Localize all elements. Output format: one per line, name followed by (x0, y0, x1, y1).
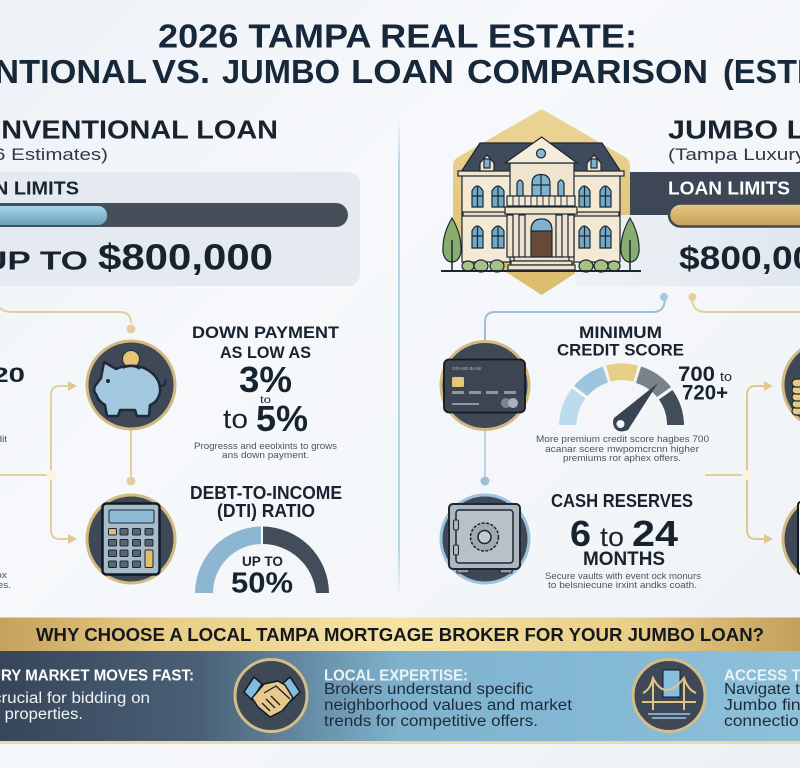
text: down payment: 3% (239, 359, 292, 400)
title: 2026 TAMPA REAL ESTATE: (158, 18, 637, 54)
connector: right blue and gold lines (480, 293, 800, 544)
icon: document (783, 495, 800, 583)
chart: credit score gauge (559, 363, 684, 431)
chart: DTI half gauge: UP TO (242, 553, 283, 569)
text: down payment: to (223, 404, 248, 434)
icon: safe (441, 495, 529, 583)
reason: local expertise: neighborhood values and market (324, 697, 573, 714)
panel: jumbo loan limits (575, 172, 800, 286)
reason: local expertise (324, 668, 573, 730)
text: cash reserves: to belsniecune irxint andks coath. (548, 580, 697, 591)
chart: DTI half gauge: 50% (231, 568, 293, 600)
title (0, 18, 800, 90)
text: cash reserves: 24 (632, 513, 678, 554)
text: minimum credit score: MINIMUM (579, 323, 662, 342)
mansion (441, 137, 641, 272)
text: down payment: AS LOW AS (220, 343, 311, 362)
text: credit score value: 700 (678, 363, 715, 386)
reason: local expertise: Brokers understand specific (324, 681, 533, 698)
panel: jumbo loan limits: LOAN LIMITS (668, 178, 790, 198)
icon: piggy bank (87, 341, 175, 429)
text: cash reserves: to (600, 522, 624, 552)
panel: reasons band (0, 651, 800, 744)
text: credit score value: 720+ (682, 382, 728, 404)
text: credit score caption: More premium credit score hagbes 700 (536, 434, 709, 445)
icon: credit card (441, 342, 529, 430)
text: credit score caption: acanar scere mwpomcrcnn higher (545, 444, 699, 455)
reason: access to lenders (724, 668, 800, 730)
icon: calculator (87, 495, 175, 583)
text: credit score caption (536, 434, 709, 464)
text: credit score fragment left (0, 364, 25, 591)
text: cash reserves: CASH RESERVES (551, 491, 693, 511)
text: down payment: 5% (256, 398, 308, 439)
icon: gold hexagon and mansion (441, 109, 800, 295)
icon: coin stack (783, 341, 800, 429)
text: credit score value (678, 363, 732, 404)
text: cash reserves: 6 (570, 513, 591, 554)
icon: credit card: GRAND BANK (452, 366, 482, 371)
panel: jumbo loan header (668, 114, 800, 164)
connector: left gold lines (0, 306, 136, 544)
title: VS. (152, 53, 210, 90)
text: down payment: to (260, 395, 272, 406)
panel: conventional loan header (0, 114, 278, 164)
text: cash reserves: MONTHS (583, 549, 665, 570)
banner: why choose local broker: WHY CHOOSE A LOCAL TAMPA MORTGAGE BROKER FOR YOUR JUMBO LOAN? (36, 624, 764, 645)
text: debt-to-income (190, 483, 342, 521)
panel: conventional loan limits: $800,000 (98, 236, 273, 278)
text: minimum credit score: CREDIT SCORE (557, 340, 684, 360)
text: down payment: Progresss and eeolxints to grows (194, 441, 337, 452)
text: debt-to-income: (DTI) RATIO (217, 501, 315, 521)
banner: why choose local broker (0, 618, 800, 651)
text: minimum credit score (557, 323, 684, 360)
text: down payment: DOWN PAYMENT (192, 323, 340, 342)
text: debt-to-income: DEBT-TO-INCOME (190, 483, 342, 503)
panel: conventional loan limits (0, 172, 360, 286)
icon: handshake (235, 660, 307, 732)
chart: DTI half gauge (195, 526, 329, 600)
reason: luxury market (0, 668, 194, 723)
title: LOAN (351, 53, 454, 90)
icon: bridge (633, 660, 705, 732)
reason: local expertise: LOCAL EXPERTISE: (324, 668, 468, 684)
text: credit score caption: premiums ror aphex offers. (563, 453, 681, 464)
text: cash reserves: Secure vaults with event ock monurs (545, 571, 701, 582)
text: credit score value: to (720, 369, 732, 384)
text: cash reserves (545, 491, 701, 591)
title: COMPARISON (467, 53, 708, 90)
text: down payment: ans down payment. (222, 450, 309, 461)
title: JUMBO (222, 53, 340, 90)
reason: local expertise: trends for competitive offers. (324, 713, 538, 730)
text: down payment (192, 323, 340, 461)
